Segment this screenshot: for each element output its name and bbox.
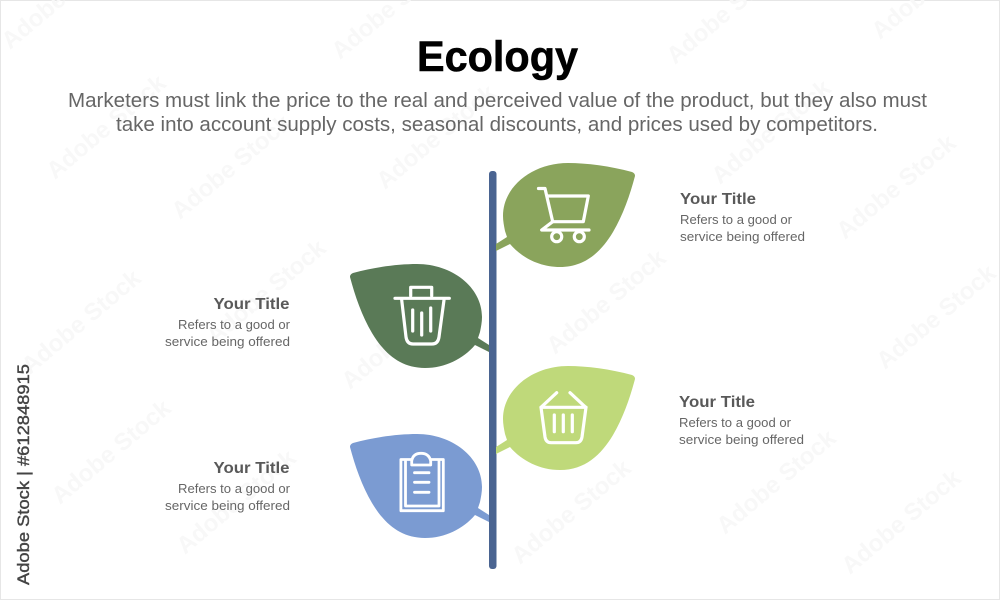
central stem (489, 171, 496, 569)
text block: lower right: service being offered (679, 432, 804, 447)
icon: trash can (395, 287, 449, 344)
text block: lower left: Refers to a good or (178, 481, 291, 496)
text block: lower right: Your Title (679, 394, 755, 411)
text block: upper left: Refers to a good or (178, 317, 291, 332)
text block: lower right (679, 394, 804, 447)
leaf: olive green (496, 163, 635, 267)
text block: upper left: Your Title (214, 296, 290, 313)
text block: upper left (165, 296, 291, 349)
stock id side label: Adobe Stock | #612848915 (14, 364, 33, 585)
text block: top right: service being offered (680, 229, 805, 244)
text block: top right (680, 191, 805, 244)
panel: lower right leaf with basket (496, 366, 635, 470)
watermark pattern: Adobe Stock (507, 454, 637, 570)
watermark pattern: Adobe Stock (167, 109, 297, 225)
title: Ecology (417, 33, 578, 81)
watermark pattern: Adobe Stock (42, 69, 172, 185)
icon: clipboard (401, 453, 443, 511)
icon: basket (541, 393, 586, 443)
watermark pattern: Adobe Stock (337, 279, 467, 395)
text block: lower right: Refers to a good or (679, 415, 792, 430)
leaf: blue (350, 434, 489, 538)
panel: top right leaf with cart (496, 163, 635, 267)
subtitle text (68, 90, 927, 136)
watermark pattern: Adobe Stock (707, 74, 837, 190)
panel: upper left leaf with trash can (350, 264, 489, 368)
text block: lower left: service being offered (165, 498, 290, 513)
text block: lower left: Your Title (214, 460, 290, 477)
watermark pattern: Adobe Stock (837, 464, 967, 580)
leaf: dark green (350, 264, 489, 368)
text block: top right: Refers to a good or (680, 212, 793, 227)
watermark pattern: Adobe Stock (712, 424, 842, 540)
subtitle text: take into account supply costs, seasonal discounts, and prices used by competitors. (116, 114, 878, 136)
text block: lower left (165, 460, 291, 513)
watermark pattern: Adobe Stock (872, 259, 1000, 375)
watermark pattern: Adobe Stock (202, 234, 332, 350)
watermark pattern: Adobe Stock (542, 244, 672, 360)
watermark pattern: Adobe Stock (372, 79, 502, 195)
icon: shopping cart (538, 188, 589, 242)
watermark pattern: Adobe Stock (17, 264, 147, 380)
subtitle text: Marketers must link the price to the real and perceived value of the product, but they also must (68, 90, 927, 112)
text block: upper left: service being offered (165, 334, 290, 349)
watermark pattern: Adobe Stock (172, 444, 302, 560)
watermark pattern: Adobe Stock (47, 394, 177, 510)
text block: top right: Your Title (680, 191, 756, 208)
leaf: light green (496, 366, 635, 470)
panel: lower left leaf with clipboard (350, 434, 489, 538)
watermark pattern: Adobe Stock (832, 129, 962, 245)
